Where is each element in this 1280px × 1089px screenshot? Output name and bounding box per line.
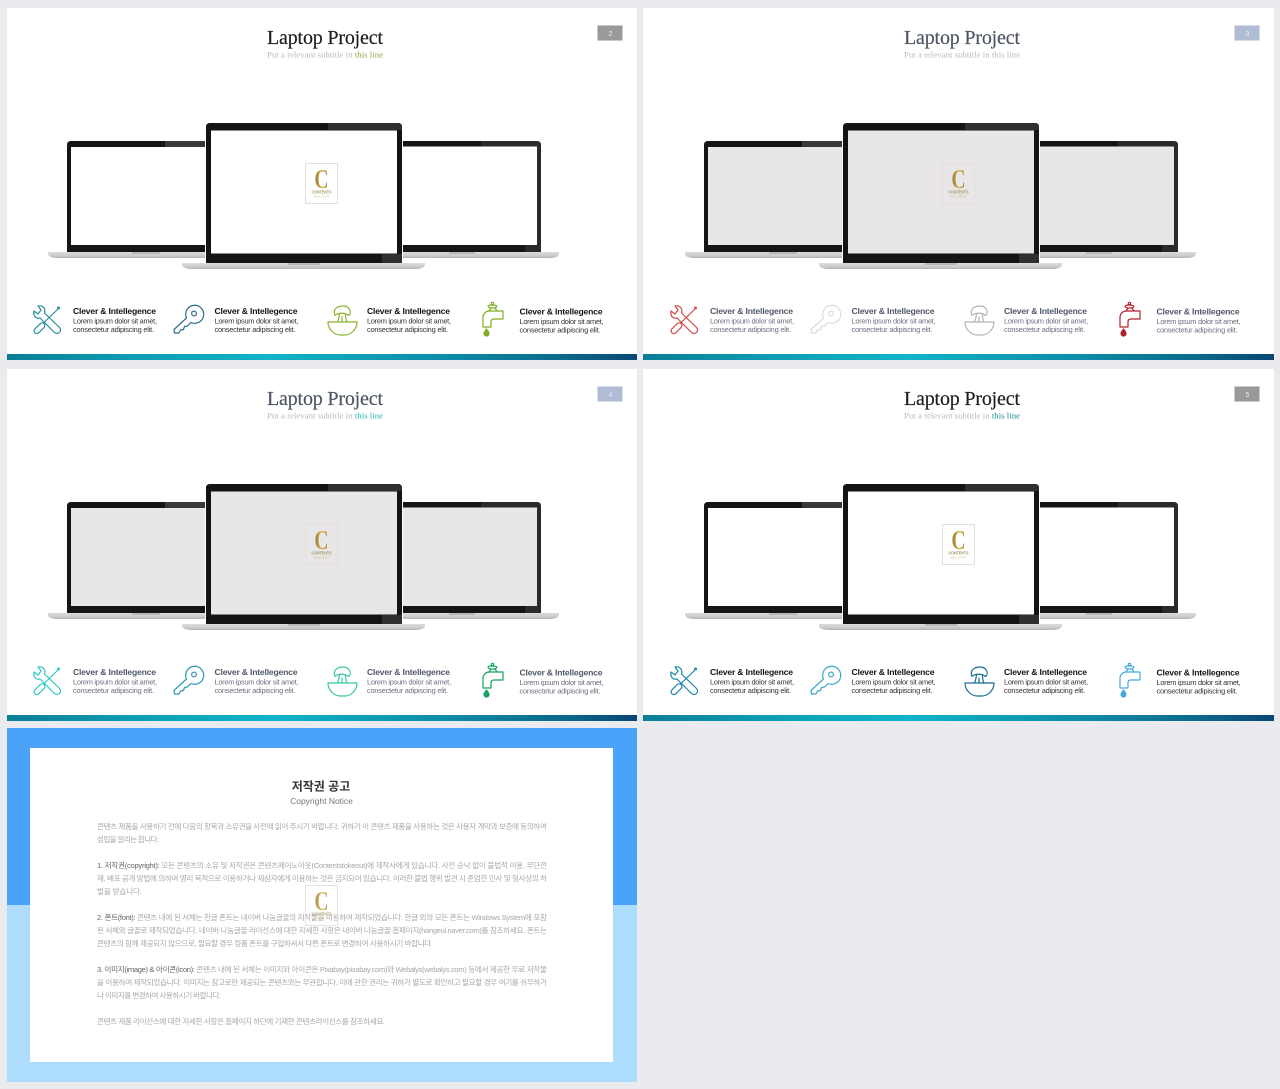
footer bar — [7, 354, 637, 360]
feature 3 text: consectetur adipiscing elit. — [367, 686, 448, 695]
feature 4 text: Clever & Intellegence — [520, 668, 603, 678]
page number badge — [597, 25, 623, 41]
title: Laptop Project — [267, 27, 383, 49]
feature 4 text: Lorem ipsum dolor sit amet, — [520, 317, 604, 326]
feature 3 text: Lorem ipsum dolor sit amet, — [367, 316, 451, 326]
feature 2 text: Lorem ipsum dolor sit amet, — [852, 316, 936, 326]
feature 4 text: Lorem ipsum dolor sit amet, — [1156, 678, 1240, 687]
feature 4: tap icon — [483, 663, 503, 697]
feature 3 text — [1004, 306, 1088, 334]
paragraph 3: image and icon: 3. 이미지(image) & 아이콘(icon): 콘텐츠 내에 된 서체는 이미지와 아이콘은 Pixabay(pixabay.com)와 Webalys(webalys.com) 등에서 제공한 무료 저작물 — [97, 964, 547, 974]
feature 1 text: Clever & Intellegence — [73, 667, 156, 677]
feature 4 text: consectetur adipiscing elit. — [1156, 686, 1238, 696]
footer bar — [7, 715, 637, 721]
feature 3 text — [367, 667, 451, 695]
page number badge — [1234, 25, 1260, 41]
feature 3 text: Clever & Intellegence — [1004, 667, 1087, 677]
feature 2 text: Lorem ipsum dolor sit amet, — [214, 316, 298, 326]
feature 3 text: consectetur adipiscing elit. — [1004, 325, 1085, 334]
title: Laptop Project — [904, 27, 1020, 49]
feature 3: mushroom bowl icon — [328, 306, 357, 335]
notice subheading: Copyright Notice — [290, 796, 353, 806]
feature 4 text: consectetur adipiscing elit. — [1156, 326, 1238, 334]
notice intro paragraph — [97, 821, 547, 844]
slide 5: copyright notice panel — [7, 728, 637, 1082]
feature 2: key icon — [174, 305, 204, 333]
paragraph 1: copyright — [97, 860, 547, 896]
page number badge — [1234, 386, 1260, 402]
feature 4 text: consectetur adipiscing elit. — [520, 686, 600, 696]
feature 4 text: consectetur adipiscing elit. — [520, 326, 600, 334]
feature 2 text: consectetur adipiscing elit. — [852, 325, 932, 334]
notice intro paragraph: 성립을 알리는 합니다. — [97, 834, 159, 844]
feature 2 text — [214, 306, 298, 334]
paragraph 2: font: 된 서체와 글꼴로 제작되었습니다. 네이버 나눔글꼴 라이선스에 대한 자세한 사항은 네이버 나눔글꼴 홈페이지(hangeul.naver.com)를 참조하세요. 폰트는 — [97, 925, 547, 935]
feature 3 text: Clever & Intellegence — [367, 667, 450, 677]
feature 3: mushroom bowl icon — [965, 667, 994, 696]
feature 2 text — [852, 667, 936, 695]
feature 2: key icon — [811, 666, 841, 694]
page number badge — [597, 386, 623, 402]
feature 3 text: consectetur adipiscing elit. — [1004, 686, 1085, 695]
feature 2: key icon — [811, 305, 841, 333]
feature 1: tools icon — [33, 667, 61, 696]
feature 1 text — [710, 306, 794, 334]
slide 1: laptop project panel — [7, 8, 637, 360]
feature 2 text: Lorem ipsum dolor sit amet, — [852, 678, 936, 686]
feature 1: tools icon — [670, 667, 698, 696]
feature 3 text — [367, 306, 451, 334]
feature 2: key icon — [174, 666, 204, 694]
slide 2: laptop project panel, grey screens — [643, 8, 1274, 360]
notice intro paragraph: 콘텐츠 제품을 사용하기 전에 다음의 항목과 소유권을 사전에 읽어 주시기 바랍니다. 귀하가 이 콘텐츠 제품을 사용하는 것은 사용자 계약과 보증에 동의하여 — [97, 821, 547, 831]
slide 4: laptop project panel, white screens, blue icons — [643, 369, 1274, 721]
logo on centre screen — [306, 164, 338, 204]
feature 3: mushroom bowl icon — [328, 667, 357, 696]
three laptops — [48, 484, 559, 630]
three laptops — [685, 123, 1196, 269]
feature 1 text: consectetur adipiscing elit. — [710, 686, 791, 695]
feature 2 text: consectetur adipiscing elit. — [852, 686, 932, 695]
feature 1 text: consectetur adipiscing elit. — [73, 686, 154, 695]
feature 3 text: Lorem ipsum dolor sit amet, — [1004, 678, 1088, 686]
subtitle: Put a relevant subtitle in this line — [904, 410, 1020, 420]
feature 2 text: consectetur adipiscing elit. — [214, 686, 296, 695]
paragraph 2: font — [97, 912, 547, 948]
feature 1 text: consectetur adipiscing elit. — [73, 325, 154, 334]
feature 4 text: Clever & Intellegence — [1156, 306, 1240, 316]
footer bar — [643, 354, 1274, 360]
three laptops — [48, 123, 559, 269]
feature 1 text: Clever & Intellegence — [73, 306, 156, 316]
feature 3: mushroom bowl icon — [965, 306, 994, 335]
feature 4 text — [1156, 668, 1240, 696]
page number badge: 2 — [609, 31, 613, 38]
feature 1 text: Lorem ipsum dolor sit amet, — [73, 316, 157, 326]
slide 3: laptop project panel, grey screens, teal icons — [7, 369, 637, 721]
feature 3 text: consectetur adipiscing elit. — [367, 325, 448, 334]
title: Laptop Project — [904, 388, 1020, 410]
feature 2 text — [214, 667, 298, 695]
page number badge: 3 — [1246, 31, 1250, 38]
feature 1 text — [73, 667, 157, 695]
feature 4 text: Clever & Intellegence — [1156, 668, 1240, 678]
feature 4: tap icon — [483, 302, 503, 336]
feature 2 text: consectetur adipiscing elit. — [214, 325, 296, 334]
feature 1 text: Lorem ipsum dolor sit amet, — [710, 678, 794, 686]
closing licence line: 콘텐츠 제품 라이선스에 대한 자세한 사항은 홈페이지 하단에 기재한 콘텐츠라이선스를 참조하세요. — [97, 1016, 385, 1026]
feature 2 text: Clever & Intellegence — [852, 667, 935, 677]
footer bar — [643, 715, 1274, 721]
feature 3 text: Lorem ipsum dolor sit amet, — [1004, 316, 1088, 326]
feature 3 text: Clever & Intellegence — [1004, 306, 1087, 316]
subtitle: Put a relevant subtitle in this line — [904, 50, 1020, 60]
feature 4 text — [520, 306, 604, 334]
feature 4 text: Lorem ipsum dolor sit amet, — [1156, 317, 1240, 326]
feature 2 text — [852, 306, 936, 334]
paragraph 3: image and icon — [97, 964, 547, 1000]
page number badge: 4 — [609, 392, 613, 399]
feature 4 text — [1156, 306, 1240, 334]
feature 1 text: consectetur adipiscing elit. — [710, 325, 791, 334]
notice heading: 저작권 공고 — [292, 778, 350, 794]
feature 4: tap icon — [1120, 302, 1140, 336]
feature 3 text — [1004, 667, 1088, 695]
feature 1 text — [710, 667, 794, 695]
logo on centre screen — [306, 524, 338, 564]
paragraph 3: image and icon: 나 이미지를 변경하여 사용하시기 바랍니다. — [97, 990, 221, 1000]
feature 2 text: Lorem ipsum dolor sit amet, — [214, 678, 298, 686]
page number badge: 5 — [1246, 392, 1250, 399]
logo on centre screen — [942, 524, 974, 564]
feature 1 text: Clever & Intellegence — [710, 667, 793, 677]
paragraph 1: copyright: 재, 배포 공개 방법에 의하여 영리 목적으로 이용하거나 제삼자에게 이용하는 것은 금지되어 있습니다. 이러한 불법 행위 발견 시 준엄한 민사 및 형사상의 처 — [97, 873, 547, 883]
feature 2 text: Clever & Intellegence — [214, 306, 298, 316]
feature 2 text: Clever & Intellegence — [852, 306, 935, 316]
feature 1: tools icon — [33, 306, 61, 335]
feature 1 text: Clever & Intellegence — [710, 306, 793, 316]
feature 1 text: Lorem ipsum dolor sit amet, — [73, 678, 157, 686]
title: Laptop Project — [267, 388, 383, 410]
subtitle: Put a relevant subtitle in this line — [267, 50, 383, 60]
feature 4 text — [520, 668, 604, 696]
paragraph 2: font: 2. 폰트(font): 콘텐츠 내에 된 서체는 한글 폰트는 네이버 나눔글꼴의 저작물을 이용하여 제작되었습니다. 한글 외의 모든 폰트는 Windows System에 포함 — [97, 912, 547, 922]
feature 2 text: Clever & Intellegence — [214, 667, 298, 677]
three laptops — [685, 484, 1196, 630]
feature 4 text: Clever & Intellegence — [520, 306, 603, 316]
paragraph 2: font: 콘텐츠의 함께 제공되지 않으므로, 필요할 경우 정품 폰트를 구입하셔서 다른 폰트로 변경하여 사용하시기 바랍니다. — [97, 938, 433, 948]
feature 1: tools icon — [670, 306, 698, 335]
watermark logo — [306, 886, 338, 926]
paragraph 3: image and icon: 을 이용하여 제작되었습니다. 이미지는 참고로만 제공되는 콘텐츠와는 무관합니다. 이에 관한 권리는 귀하가 별도로 확인하고 필요할 경우 여기를 쉬우하거 — [97, 977, 547, 987]
feature 1 text — [73, 306, 157, 334]
feature 3 text: Lorem ipsum dolor sit amet, — [367, 678, 451, 686]
feature 3 text: Clever & Intellegence — [367, 306, 450, 316]
subtitle: Put a relevant subtitle in this line — [267, 410, 383, 420]
feature 4: tap icon — [1120, 663, 1140, 697]
paragraph 1: copyright: 1. 저작권(copyright): 모든 콘텐츠의 소유 및 저작권은 콘텐츠메이노아웃(Contentstokeout)에 제작사에게 있습니다. 사전 승낙 없이 불법적 이용, 무단전 — [97, 860, 547, 870]
feature 4 text: Lorem ipsum dolor sit amet, — [520, 678, 604, 687]
feature 1 text: Lorem ipsum dolor sit amet, — [710, 316, 794, 326]
logo on centre screen — [942, 164, 974, 204]
paragraph 1: copyright: 벌을 받습니다. — [97, 886, 142, 896]
